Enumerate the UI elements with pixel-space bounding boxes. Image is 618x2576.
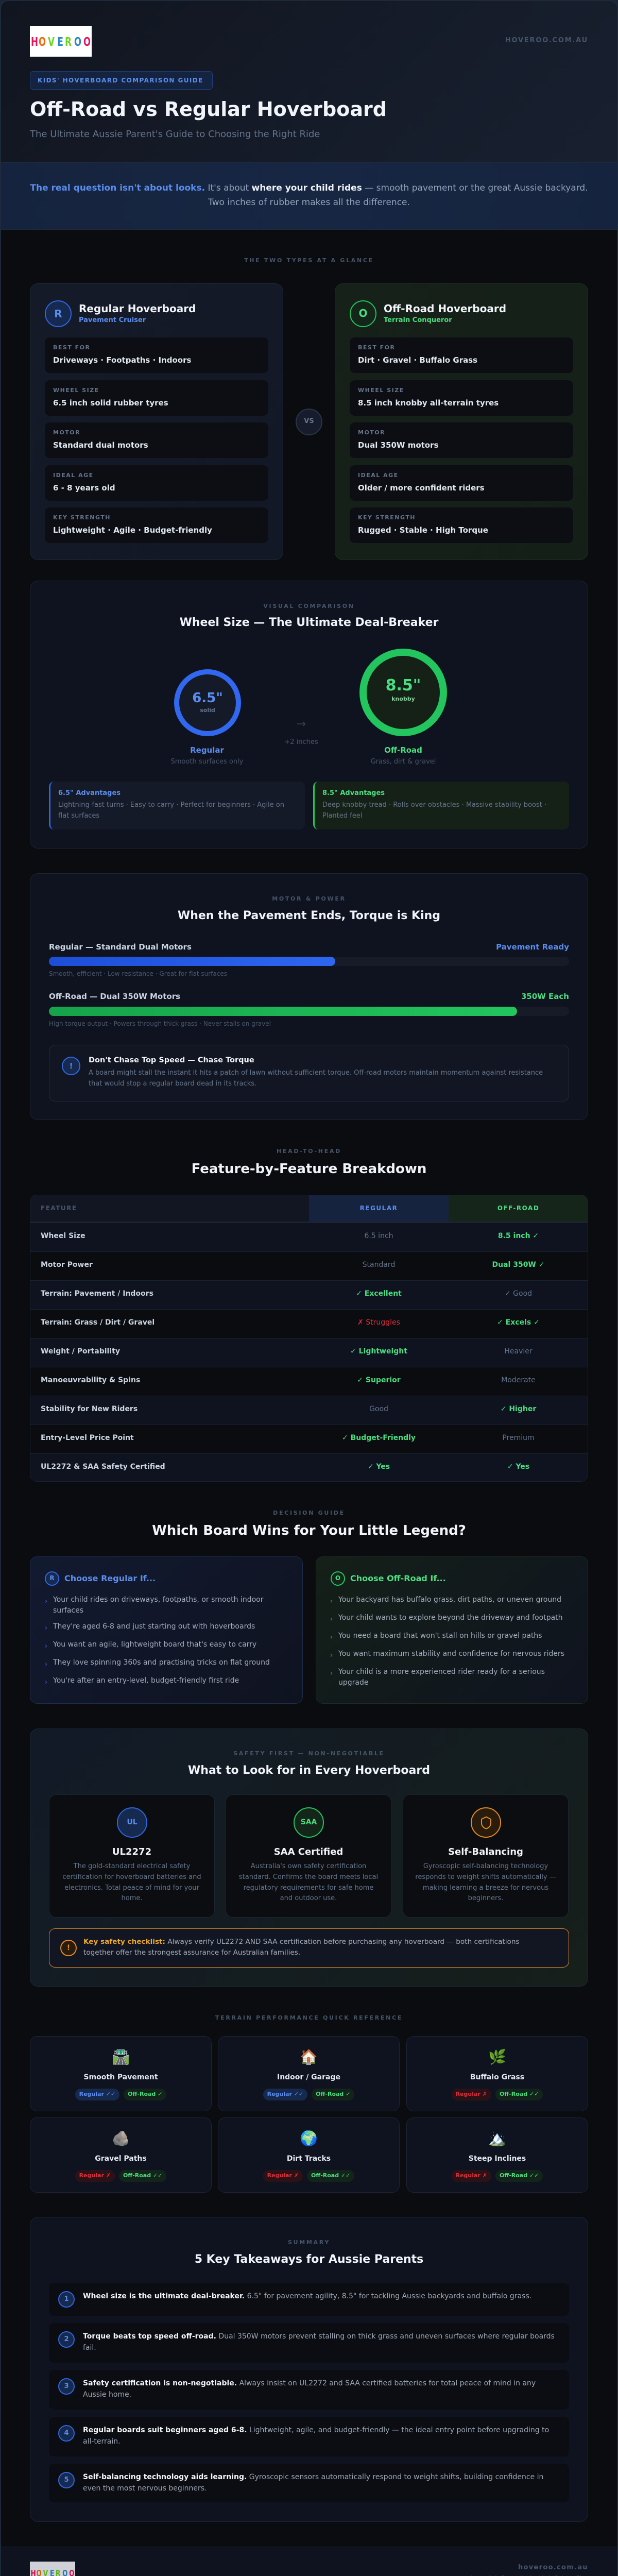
takeaway 2: 2 xyxy=(64,2335,69,2343)
best for: Driveways · Footpaths · Indoors xyxy=(53,355,191,365)
row: motor power: Motor Power xyxy=(41,1261,93,1269)
reason list: › xyxy=(330,1670,333,1677)
key strength xyxy=(45,507,268,543)
wheel size: 6.5 inch solid rubber tyres xyxy=(53,398,168,408)
best for xyxy=(45,337,268,373)
row: pavement: Terrain: Pavement / Indoors xyxy=(41,1290,153,1298)
card: dirt: Dirt Tracks xyxy=(287,2155,331,2163)
row: pavement xyxy=(30,1280,588,1309)
off-road motor bar xyxy=(49,1007,569,1016)
callout title: Don't Chase Top Speed — Chase Torque xyxy=(89,1056,254,1064)
panel title: Choose Regular If... xyxy=(64,1573,156,1583)
vs badge: VS xyxy=(304,417,314,425)
row: certified xyxy=(30,1453,588,1481)
key strength: Lightweight · Agile · Budget-friendly xyxy=(53,526,212,535)
comparison table xyxy=(30,1195,588,1482)
takeaway 1 xyxy=(49,2283,569,2316)
card: SAA: regulatory requirements for safe home xyxy=(244,1884,373,1892)
card: self-balancing: Self-Balancing xyxy=(448,1846,523,1857)
icon: O xyxy=(350,300,376,327)
icon: R xyxy=(45,300,72,327)
wheel: regular: solid xyxy=(200,707,215,714)
best for: BEST FOR xyxy=(358,344,396,351)
ideal age: 6 - 8 years old xyxy=(53,483,115,493)
reason list: › xyxy=(330,1652,333,1659)
card: indoor xyxy=(218,2036,400,2111)
card: UL2272: home. xyxy=(122,1894,142,1902)
logo: R xyxy=(65,36,72,49)
section label: decision guide: DECISION GUIDE xyxy=(273,1510,345,1516)
callout text: A board might stall the instant it hits a patch of lawn without sufficient torque. Off-road motors maintain momentum against resistance xyxy=(89,1069,543,1077)
card title: Regular Hoverboard xyxy=(79,302,196,315)
off-road advantages: 8.5" Advantages xyxy=(322,789,385,797)
takeaway 1: Wheel size is the ultimate deal-breaker. 6.5" for pavement agility, 8.5" for tackling Aussie backyards and buffalo grass. xyxy=(83,2292,531,2300)
card: inclines: Steep Inclines xyxy=(469,2155,526,2163)
ideal age xyxy=(45,465,268,501)
takeaway 2: fail. xyxy=(83,2344,96,2352)
reason list: They love spinning 360s and practising tricks on flat ground xyxy=(53,1658,270,1667)
panel: choose regular xyxy=(30,1556,303,1704)
header band xyxy=(0,0,618,162)
card: gravel: Gravel Paths xyxy=(95,2155,147,2163)
card: smooth pavement: Regular ✓✓ xyxy=(79,2091,115,2097)
row: price: Premium xyxy=(502,1434,535,1442)
reason list: Your child wants to explore beyond the driveway and footpath xyxy=(338,1614,563,1622)
card: inclines: Regular ✗ xyxy=(456,2172,487,2179)
row: weight: Weight / Portability xyxy=(41,1347,120,1355)
reason list: › xyxy=(330,1598,333,1605)
row: pavement: ✓ Excellent xyxy=(356,1290,402,1298)
wheel: regular xyxy=(174,669,241,736)
card subtitle: Terrain Conqueror xyxy=(384,316,452,324)
card: indoor: Regular ✓✓ xyxy=(267,2091,303,2097)
takeaway 3: Aussie home. xyxy=(83,2391,131,2399)
motor xyxy=(350,422,573,458)
card: UL2272: UL2272 xyxy=(112,1846,151,1857)
reason list: › xyxy=(45,1624,47,1632)
key strength xyxy=(350,507,573,543)
card: buffalo grass: Buffalo Grass xyxy=(470,2073,524,2081)
row: price: ✓ Budget-Friendly xyxy=(342,1434,416,1442)
row: price: Entry-Level Price Point xyxy=(41,1434,134,1442)
icon: UL xyxy=(117,1807,147,1838)
reason list: › xyxy=(45,1660,47,1668)
takeaway 5: even the most nervous beginners. xyxy=(83,2484,207,2493)
intro banner: Two inches of rubber makes all the difference. xyxy=(208,197,410,208)
motor xyxy=(45,422,268,458)
card: indoor: Indoor / Garage xyxy=(277,2073,340,2081)
reason list xyxy=(330,1596,564,1687)
card: gravel xyxy=(30,2117,212,2193)
takeaway 3: 3 xyxy=(64,2382,69,2390)
card: smooth pavement xyxy=(30,2036,212,2111)
section label: terrain: TERRAIN PERFORMANCE QUICK REFERENCE xyxy=(215,2014,403,2021)
best for: Dirt · Gravel · Buffalo Grass xyxy=(358,355,477,365)
icon: globe: 🌍 xyxy=(300,2130,318,2147)
icon: house: 🏠 xyxy=(300,2048,318,2065)
takeaway 5: 5 xyxy=(64,2476,69,2484)
reason list: › xyxy=(330,1634,333,1641)
row: wheel size: Wheel Size xyxy=(41,1232,85,1240)
section label: head to head: HEAD-TO-HEAD xyxy=(277,1148,341,1155)
row: weight: Heavier xyxy=(504,1347,533,1355)
row: price xyxy=(30,1425,588,1453)
card: smooth pavement: Smooth Pavement xyxy=(83,2073,158,2081)
off-road caption: Off-Road xyxy=(384,745,422,755)
row: manoeuvrability: Moderate xyxy=(501,1376,536,1384)
card: buffalo grass: Regular ✗ xyxy=(456,2091,487,2097)
footer xyxy=(0,2547,618,2576)
regular motor bar xyxy=(49,957,569,966)
reason list: You want maximum stability and confidence for nervous riders xyxy=(338,1650,564,1658)
motor: Standard dual motors xyxy=(53,440,148,450)
card: self-balancing: beginners. xyxy=(468,1894,503,1902)
card: inclines: Off-Road ✓✓ xyxy=(500,2172,539,2179)
row: grass: Terrain: Grass / Dirt / Gravel xyxy=(41,1318,154,1327)
card: dirt: Regular ✗ xyxy=(267,2172,299,2179)
table header: REGULAR xyxy=(360,1205,398,1212)
motor: MOTOR xyxy=(53,429,80,436)
row: manoeuvrability: Manoeuvrability & Spins xyxy=(41,1376,140,1384)
reason list: upgrade xyxy=(338,1679,368,1687)
ideal age: IDEAL AGE xyxy=(53,472,94,479)
off-road motor value: 350W Each xyxy=(521,992,569,1001)
reason list: You want an agile, lightweight board that's easy to carry xyxy=(53,1640,256,1649)
off-road motor label: Off-Road — Dual 350W Motors xyxy=(49,992,180,1001)
intro banner xyxy=(0,162,618,230)
callout: safety checklist xyxy=(49,1928,569,1968)
card: smooth pavement: Off-Road ✓ xyxy=(128,2091,162,2097)
reason list: › xyxy=(45,1679,47,1686)
row: wheel size xyxy=(30,1223,588,1251)
off-road note: Grass, dirt & gravel xyxy=(371,758,436,766)
logo: V xyxy=(48,36,55,49)
card: SAA xyxy=(226,1794,391,1918)
row: grass: ✗ Struggles xyxy=(357,1318,400,1327)
icon: R xyxy=(45,1571,59,1586)
panel: off-road hoverboard xyxy=(335,283,588,560)
subtitle: The Ultimate Aussie Parent's Guide to Choosing the Right Ride xyxy=(30,129,320,140)
callout text xyxy=(89,1069,543,1088)
card: gravel: Off-Road ✓✓ xyxy=(123,2172,162,2179)
card: buffalo grass: Off-Road ✓✓ xyxy=(500,2091,539,2097)
card: UL2272: The gold-standard electrical safety xyxy=(74,1862,190,1870)
reason list: › xyxy=(330,1616,333,1623)
card: gravel: Regular ✗ xyxy=(79,2172,111,2179)
row: stability: Stability for New Riders xyxy=(41,1405,138,1413)
callout text: that would stop a regular board dead in its tracks. xyxy=(89,1080,256,1088)
panel: motor and power xyxy=(30,873,588,1120)
card title: Off-Road Hoverboard xyxy=(384,302,506,315)
checklist text: together offer the strongest assurance for Australian families. xyxy=(83,1948,300,1957)
icon: shield xyxy=(471,1807,501,1838)
section title: which board: Which Board Wins for Your Little Legend? xyxy=(152,1523,466,1538)
card subtitle: Pavement Cruiser xyxy=(79,316,146,324)
title: Off-Road vs Regular Hoverboard xyxy=(30,98,387,121)
takeaway 4 xyxy=(49,2417,569,2456)
takeaway 5: Self-balancing technology aids learning. Gyroscopic sensors automatically respond to weight shifts, building confidence in xyxy=(83,2473,543,2481)
takeaway 2 xyxy=(49,2323,569,2363)
section label: SUMMARY xyxy=(288,2239,330,2246)
site name: HOVEROO.COM.AU xyxy=(505,37,588,44)
section label: VISUAL COMPARISON xyxy=(263,603,355,609)
card: indoor: Off-Road ✓ xyxy=(316,2091,350,2097)
off-road advantages xyxy=(313,782,569,829)
row: stability xyxy=(30,1396,588,1425)
reason list: surfaces xyxy=(53,1606,83,1615)
card: self-balancing: responds to weight shifts automatically — xyxy=(415,1873,556,1881)
takeaway 3 xyxy=(49,2370,569,2410)
row: motor power xyxy=(30,1251,588,1280)
icon: alert: ! xyxy=(70,1061,73,1071)
card: self-balancing xyxy=(403,1794,569,1918)
reason list: You're after an entry-level, budget-friendly first ride xyxy=(53,1676,239,1685)
row: manoeuvrability xyxy=(30,1367,588,1396)
card: UL2272: electronics. Total peace of mind for your xyxy=(64,1884,199,1892)
row: pavement: ✓ Good xyxy=(505,1290,532,1298)
logo: E xyxy=(57,36,63,49)
takeaway 2: Torque beats top speed off-road. Dual 350W motors prevent stalling on thick grass and uneven surfaces where regular boards xyxy=(83,2332,555,2341)
icon: alert xyxy=(62,1057,80,1075)
row: wheel size: 6.5 inch xyxy=(364,1232,393,1240)
regular note: Smooth surfaces only xyxy=(171,758,243,766)
table header: FEATURE xyxy=(41,1205,77,1212)
card: UL2272 xyxy=(49,1794,215,1918)
badge: KIDS' HOVERBOARD COMPARISON GUIDE xyxy=(38,77,203,84)
icon: O: O xyxy=(358,307,368,319)
motor: MOTOR xyxy=(358,429,385,436)
panel: wheel size comparison xyxy=(30,581,588,849)
card: SAA: standard. Confirms the board meets local xyxy=(239,1873,378,1881)
motor: Dual 350W motors xyxy=(358,440,438,450)
icon: SAA: SAA xyxy=(301,1818,317,1826)
icon: warning: ! xyxy=(67,1944,70,1952)
icon: road: 🛣️ xyxy=(112,2048,130,2065)
panel: summary xyxy=(30,2217,588,2522)
section title: Wheel Size — The Ultimate Deal-Breaker xyxy=(180,616,438,629)
wheel: regular: 6.5" xyxy=(192,690,223,706)
regular caption: Regular xyxy=(190,745,224,755)
row: wheel size: 8.5 inch ✓ xyxy=(498,1232,539,1240)
ideal age xyxy=(350,465,573,501)
reason list xyxy=(45,1596,270,1686)
section title: 5 Key Takeaways for Aussie Parents xyxy=(195,2253,423,2266)
card: SAA: Australia's own safety certification xyxy=(251,1862,366,1870)
regular advantages xyxy=(49,782,305,829)
row: certified: UL2272 & SAA Safety Certified xyxy=(41,1463,165,1471)
regular motor label: Regular — Standard Dual Motors xyxy=(49,942,192,952)
wheel gain label: +2 inches xyxy=(284,738,318,746)
panel: choose off-road xyxy=(316,1556,588,1704)
icon: herb: 🌿 xyxy=(488,2048,506,2065)
regular motor note: Smooth, efficient · Low resistance · Great for flat surfaces xyxy=(49,970,227,977)
wheel size: 8.5 inch knobby all-terrain tyres xyxy=(358,398,499,408)
icon: rock: 🪨 xyxy=(112,2130,130,2147)
icon: SAA xyxy=(294,1807,324,1838)
card: dirt: Off-Road ✓✓ xyxy=(311,2172,350,2179)
arrow: → xyxy=(297,718,306,731)
ideal age: IDEAL AGE xyxy=(358,472,399,479)
checklist text xyxy=(83,1938,520,1957)
reason list: › xyxy=(45,1598,47,1605)
row: stability: ✓ Higher xyxy=(501,1405,536,1413)
panel: safety xyxy=(30,1728,588,1987)
icon: UL: UL xyxy=(127,1818,138,1826)
intro banner: The real question isn't about looks. It's about where your child rides — smooth pavement or the great Aussie backyard. xyxy=(30,183,588,193)
icon: warning xyxy=(60,1940,77,1956)
panel: regular hoverboard xyxy=(30,283,283,560)
best for xyxy=(350,337,573,373)
wheel size xyxy=(350,380,573,416)
takeaway 4: Regular boards suit beginners aged 6-8. Lightweight, agile, and budget-friendly — the ideal entry point before upgrading to xyxy=(83,2426,549,2434)
reason list: Your child is a more experienced rider ready for a serious xyxy=(338,1668,545,1676)
off-road advantages: Planted feel xyxy=(322,812,362,820)
card: buffalo grass xyxy=(406,2036,588,2111)
icon: R: R xyxy=(54,308,62,320)
section label: MOTOR & POWER xyxy=(272,895,346,902)
icon: O xyxy=(331,1571,345,1586)
takeaway 1: 1 xyxy=(64,2295,69,2303)
badge xyxy=(30,71,213,90)
section title: What to Look for in Every Hoverboard xyxy=(188,1764,430,1777)
reason list: You need a board that won't stall on hills or gravel paths xyxy=(338,1632,542,1640)
wheel size: WHEEL SIZE xyxy=(358,387,404,394)
regular advantages: flat surfaces xyxy=(58,812,99,820)
card: self-balancing: Gyroscopic self-balancing technology xyxy=(423,1862,548,1870)
table header xyxy=(30,1195,588,1223)
footer site: hoveroo.com.au xyxy=(518,2564,588,2571)
vs badge xyxy=(296,409,322,435)
card: SAA: SAA Certified xyxy=(274,1846,343,1857)
row: weight: ✓ Lightweight xyxy=(350,1347,407,1355)
icon: O: O xyxy=(335,1574,340,1582)
off-road motor note: High torque output · Powers through thick grass · Never stalls on gravel xyxy=(49,1020,271,1027)
logo xyxy=(30,26,92,57)
checklist text: Key safety checklist: Always verify UL2272 AND SAA certification before purchasing any hoverboard — both certifications xyxy=(83,1938,520,1946)
table header: OFF-ROAD xyxy=(497,1205,539,1212)
takeaway 5 xyxy=(49,2464,569,2502)
row: grass xyxy=(30,1309,588,1338)
reason list: Your child rides on driveways, footpaths, or smooth indoor xyxy=(53,1596,264,1604)
card: self-balancing: making learning a breeze for nervous xyxy=(423,1884,548,1892)
logo: O xyxy=(39,36,46,49)
reason list: Your backyard has buffalo grass, dirt paths, or uneven ground xyxy=(338,1596,561,1604)
row: manoeuvrability: ✓ Superior xyxy=(357,1376,401,1384)
row: motor power: Dual 350W ✓ xyxy=(492,1261,544,1269)
footer logo xyxy=(30,2562,75,2576)
logo: O xyxy=(74,36,81,49)
row: grass: ✓ Excels ✓ xyxy=(497,1318,540,1327)
regular advantages: 6.5" Advantages xyxy=(58,789,121,797)
section label: SAFETY FIRST — NON-NEGOTIABLE xyxy=(233,1750,385,1757)
regular motor value: Pavement Ready xyxy=(496,942,569,952)
panel title: Choose Off-Road If... xyxy=(350,1573,446,1583)
off-road advantages: Deep knobby tread · Rolls over obstacles · Massive stability boost · xyxy=(322,801,546,809)
row: motor power: Standard xyxy=(363,1261,395,1269)
icon: mountain: 🏔️ xyxy=(488,2130,506,2147)
section title: When the Pavement Ends, Torque is King xyxy=(178,909,440,922)
card: SAA: and outdoor use. xyxy=(280,1894,337,1902)
section label: two types: THE TWO TYPES AT A GLANCE xyxy=(244,257,374,264)
takeaway 3: Safety certification is non-negotiable. Always insist on UL2272 and SAA certified batteries for total peace of mind in any xyxy=(83,2379,536,2387)
card: inclines xyxy=(406,2117,588,2193)
wheel size: WHEEL SIZE xyxy=(53,387,99,394)
icon: R: R xyxy=(49,1574,55,1582)
key strength: KEY STRENGTH xyxy=(53,514,111,521)
logo: H xyxy=(31,36,38,49)
row: stability: Good xyxy=(369,1405,388,1413)
card: UL2272: certification for hoverboard batteries and xyxy=(62,1873,201,1881)
row: certified: ✓ Yes xyxy=(368,1463,390,1471)
callout: torque xyxy=(49,1045,569,1101)
reason list: › xyxy=(45,1642,47,1650)
card: dirt xyxy=(218,2117,400,2193)
wheel: off-road: 8.5" xyxy=(386,676,421,694)
row: weight xyxy=(30,1338,588,1367)
section title: feature breakdown: Feature-by-Feature Breakdown xyxy=(192,1161,426,1177)
wheel: off-road: knobby xyxy=(391,696,415,702)
takeaway 4: 4 xyxy=(64,2429,69,2437)
reason list: They're aged 6-8 and just starting out with hoverboards xyxy=(53,1622,255,1631)
key strength: Rugged · Stable · High Torque xyxy=(358,526,488,535)
regular advantages: Lightning-fast turns · Easy to carry · Perfect for beginners · Agile on xyxy=(58,801,284,809)
best for: BEST FOR xyxy=(53,344,91,351)
wheel: off-road xyxy=(359,649,447,736)
row: certified: ✓ Yes xyxy=(507,1463,529,1471)
ideal age: Older / more confident riders xyxy=(358,483,485,493)
wheel size xyxy=(45,380,268,416)
takeaway 4: all-terrain. xyxy=(83,2437,121,2446)
key strength: KEY STRENGTH xyxy=(358,514,416,521)
